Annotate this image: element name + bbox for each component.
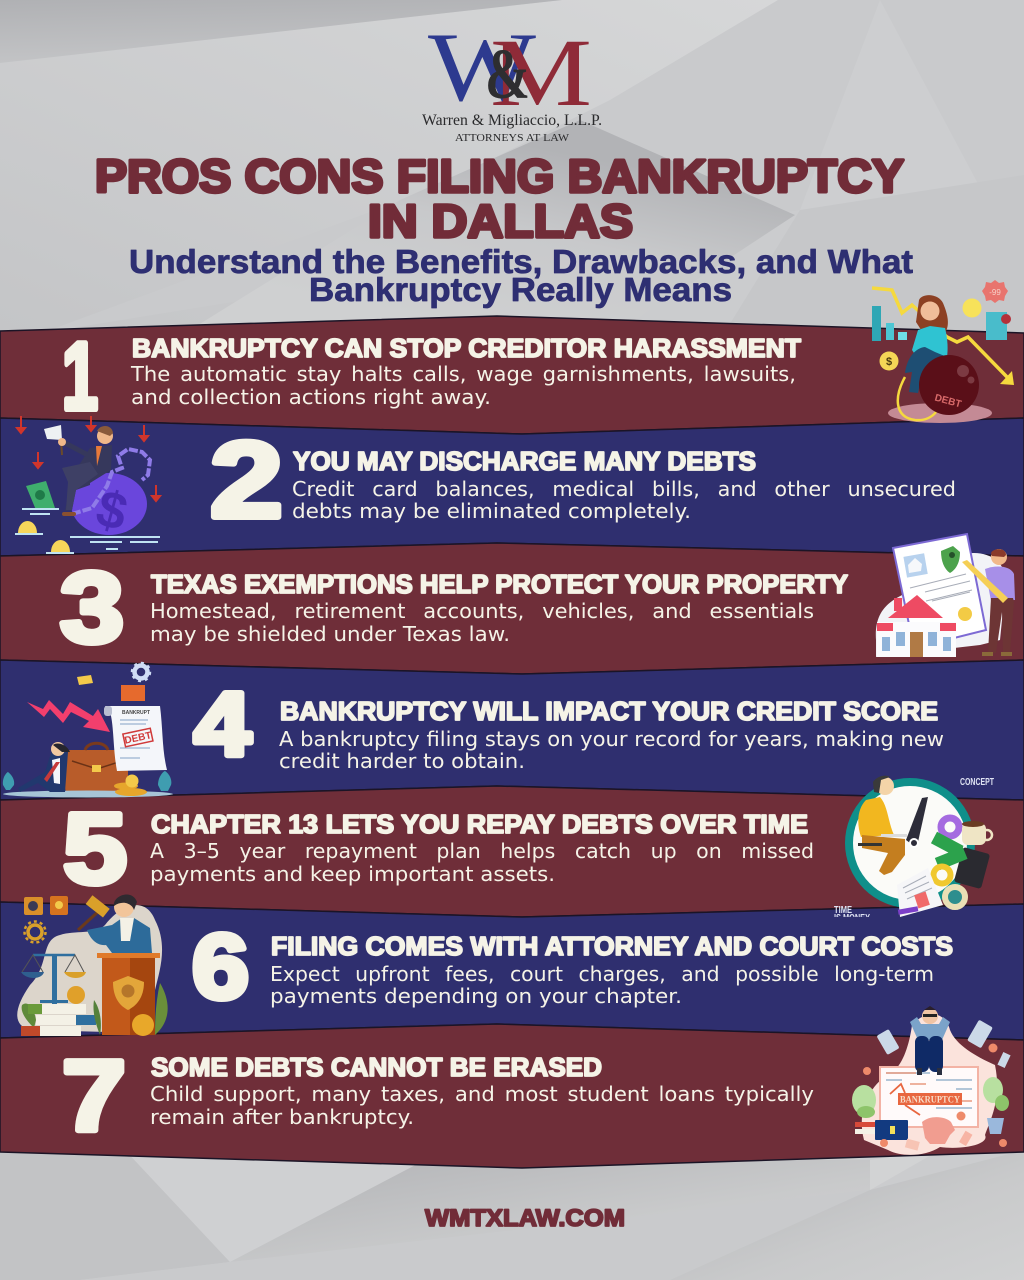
body 6: payments depending on your chapter. [270, 984, 682, 1008]
panel 4: navy band [0, 660, 1024, 800]
subtitle [129, 243, 913, 308]
heading 5: CHAPTER 13 LETS YOU REPAY DEBTS OVER TIME [151, 809, 808, 839]
body 3: may be shielded under Texas law. [150, 622, 510, 646]
icon: judge at podium with scales and coins [17, 894, 168, 1036]
title: IN DALLAS [368, 195, 633, 247]
logo: Warren & Migliaccio: M [490, 19, 592, 126]
heading 3: TEXAS EXEMPTIONS HELP PROTECT YOUR PROPERTY [151, 569, 848, 599]
icon: woman sitting on debt ball: $ [886, 356, 892, 368]
title: PROS CONS FILING BANKRUPTCY [95, 150, 904, 202]
body 4: credit harder to obtain. [279, 749, 525, 773]
item 7 text [62, 1040, 814, 1152]
item 6 text [192, 916, 953, 1018]
body 5: A 3–5 year repayment plan helps catch up on missed [150, 839, 814, 863]
heading 6: FILING COMES WITH ATTORNEY AND COURT COSTS [271, 931, 953, 961]
panel 3: maroon band [0, 543, 1024, 674]
body 3: Homestead, retirement accounts, vehicles, and essentials [150, 599, 814, 623]
icon: woman sitting on debt ball: DEBT [933, 393, 962, 410]
number 7: 7 [62, 1040, 126, 1152]
body 6 [270, 962, 934, 1008]
logo: Warren & Migliaccio: W [428, 13, 537, 122]
body 4: A bankruptcy filing stays on your record for years, making new [279, 727, 944, 751]
footer: website: WMTXLAW.COM [425, 1205, 625, 1232]
icon: clock, man at laptop and gears: IS MONEY [834, 913, 870, 924]
subtitle: Bankruptcy Really Means [309, 271, 732, 308]
icon: stressed man over bankruptcy card and piggy bank [852, 1006, 1011, 1155]
logo: Warren & Migliaccio: & [485, 34, 530, 114]
number 2: 2 [210, 419, 283, 540]
panel 6: navy band [0, 902, 1024, 1040]
number 1: 1 [62, 323, 98, 430]
icon: property document, house and man with pencil [876, 534, 1015, 657]
item 5 text [63, 793, 814, 905]
body 7: remain after bankruptcy. [150, 1105, 414, 1129]
icon: woman sitting on debt ball [872, 280, 1014, 423]
item 3 text [60, 552, 848, 664]
logo: Warren & Migliaccio: ATTORNEYS AT LAW [455, 132, 570, 144]
panel 1: maroon band [0, 316, 1024, 434]
number 6: 6 [192, 916, 249, 1018]
icon: clock, man at laptop and gears: CONCEPT [960, 776, 994, 788]
item 4 text [194, 675, 944, 775]
icon: woman sitting on debt ball: -99 [989, 288, 1001, 297]
body 1 [130, 362, 796, 409]
heading 2: YOU MAY DISCHARGE MANY DEBTS [293, 446, 756, 476]
body 5: payments and keep important assets. [150, 862, 555, 886]
body 1: and collection actions right away. [131, 385, 491, 409]
icon: man with chained dollar ball [15, 416, 160, 553]
panel 2: navy band [0, 418, 1024, 556]
item 2 text [210, 419, 956, 540]
panel 5: maroon band [0, 786, 1024, 917]
body 3 [150, 599, 814, 646]
body 2 [292, 477, 956, 523]
panel 7: maroon band [0, 1024, 1024, 1168]
icon: man with chained dollar ball: $ [90, 479, 133, 543]
icon: clock, man at laptop and gears [834, 776, 994, 924]
icon: credit score decline, bankruptcy paper and briefcase [3, 663, 173, 798]
body 2: Credit card balances, medical bills, and other unsecured [292, 477, 956, 501]
heading 1: BANKRUPTCY CAN STOP CREDITOR HARASSMENT [132, 333, 801, 363]
logo: Warren & Migliaccio [422, 13, 602, 144]
body 7: Child support, many taxes, and most student loans typically [150, 1082, 814, 1106]
icon: clock, man at laptop and gears: TIME [834, 905, 852, 916]
item 1 text [62, 323, 801, 430]
body 2: debts may be eliminated completely. [292, 499, 691, 523]
body 7 [150, 1082, 814, 1129]
heading 4: BANKRUPTCY WILL IMPACT YOUR CREDIT SCORE [280, 696, 938, 726]
icon: credit score decline, bankruptcy paper and briefcase: DEBT [124, 730, 153, 747]
heading 7: SOME DEBTS CANNOT BE ERASED [151, 1052, 602, 1082]
number 3: 3 [60, 552, 124, 664]
body 1: The automatic stay halts calls, wage garnishments, lawsuits, [130, 362, 796, 386]
body 4 [279, 727, 944, 773]
title [95, 150, 904, 247]
body 5 [150, 839, 814, 886]
number 4: 4 [194, 675, 251, 775]
number 5: 5 [63, 793, 127, 905]
logo: Warren & Migliaccio: Warren & Migliaccio, L.L.P. [422, 112, 602, 129]
body 6: Expect upfront fees, court charges, and possible long-term [270, 962, 934, 986]
icon: credit score decline, bankruptcy paper and briefcase: BANKRUPT [122, 710, 150, 716]
subtitle: Understand the Benefits, Drawbacks, and What [129, 243, 913, 280]
icon: stressed man over bankruptcy card and piggy bank: BANKRUPTCY [900, 1094, 960, 1104]
